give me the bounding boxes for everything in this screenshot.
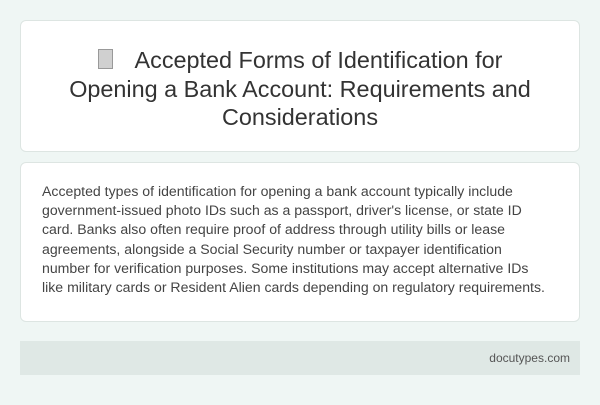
title panel bbox=[20, 20, 580, 152]
title: Accepted Forms of Identification for Opening a Bank Account: Requirements and Considerations bbox=[69, 47, 531, 130]
description text: Accepted types of identification for opening a bank account typically include government-issued photo IDs such as a passport, driver's license, or state ID card. Banks also often require proof of address through utility bills or lease agreements, alongside a Social Security number or taxpayer identification number for verification purposes. Some institutions may accept alternative IDs like military cards or Resident Alien cards depending on regulatory requirements. bbox=[42, 183, 545, 295]
icon: document bbox=[98, 49, 113, 69]
footer bar bbox=[20, 341, 580, 375]
description panel bbox=[20, 162, 580, 322]
footer text: docutypes.com bbox=[489, 351, 570, 365]
